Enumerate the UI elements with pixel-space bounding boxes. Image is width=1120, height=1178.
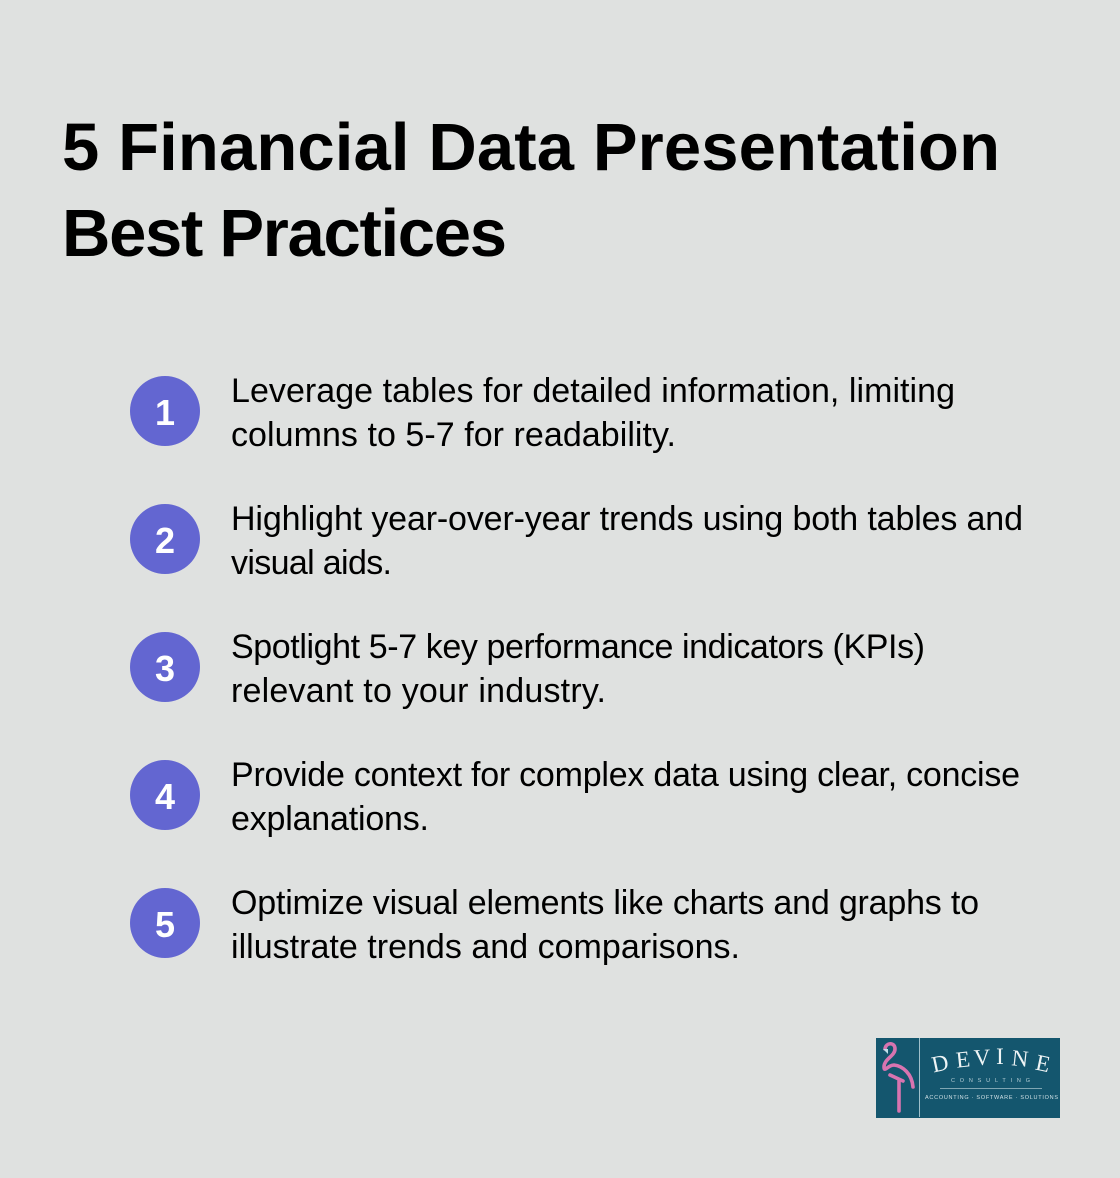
item 3 text — [231, 628, 925, 710]
number badge 3: 3 — [155, 648, 175, 689]
item 4 text — [231, 756, 1020, 838]
item 1 text — [231, 372, 955, 454]
list item 3 — [130, 628, 925, 710]
item 2 text: Highlight year-over-year trends using both tables and — [231, 500, 1023, 538]
item 3 text: relevant to your industry. — [231, 672, 606, 710]
logo wordmark: E — [955, 1046, 971, 1073]
number badge 2: 2 — [155, 520, 175, 561]
number badge 5: 5 — [155, 904, 175, 945]
logo wordmark: D — [929, 1050, 951, 1077]
list item 5 — [130, 884, 979, 966]
logo wordmark: N — [1010, 1045, 1030, 1072]
number badge 5 — [130, 888, 200, 958]
logo wordmark: V — [973, 1045, 991, 1070]
icon: flamingo — [884, 1044, 913, 1111]
number badge 1 — [130, 376, 200, 446]
number badge 4 — [130, 760, 200, 830]
title: 5 Financial Data Presentation — [62, 110, 1000, 185]
item 3 text: Spotlight 5-7 key performance indicators (KPIs) — [231, 628, 925, 666]
list item 4 — [130, 756, 1020, 838]
item 4 text: Provide context for complex data using clear, concise — [231, 756, 1020, 794]
icon: flamingo beak — [883, 1049, 888, 1054]
title: Best Practices — [62, 196, 507, 271]
number badge 2 — [130, 504, 200, 574]
logo subtitle: CONSULTING — [951, 1078, 1030, 1084]
list item 2 — [130, 500, 1023, 582]
logo: Devine Consulting — [876, 1038, 1060, 1118]
logo wordmark — [929, 1044, 1052, 1077]
number badge 3 — [130, 632, 200, 702]
item 5 text: Optimize visual elements like charts and graphs to — [231, 884, 979, 922]
logo tagline: ACCOUNTING · SOFTWARE · SOLUTIONS — [925, 1095, 1058, 1101]
title — [62, 110, 1000, 271]
number badge 4: 4 — [155, 776, 175, 817]
logo rule — [940, 1088, 1042, 1089]
item 1 text: columns to 5-7 for readability. — [231, 416, 676, 454]
item 5 text: illustrate trends and comparisons. — [231, 928, 740, 966]
item 4 text: explanations. — [231, 800, 429, 838]
logo wordmark: E — [1033, 1050, 1052, 1077]
list item 1 — [130, 372, 955, 454]
item 2 text — [231, 500, 1023, 582]
logo divider — [919, 1038, 920, 1117]
logo wordmark: I — [996, 1044, 1004, 1069]
number badge 1: 1 — [155, 392, 175, 433]
item 2 text: visual aids. — [231, 544, 392, 582]
item 1 text: Leverage tables for detailed information, limiting — [231, 372, 955, 410]
item 5 text — [231, 884, 979, 966]
